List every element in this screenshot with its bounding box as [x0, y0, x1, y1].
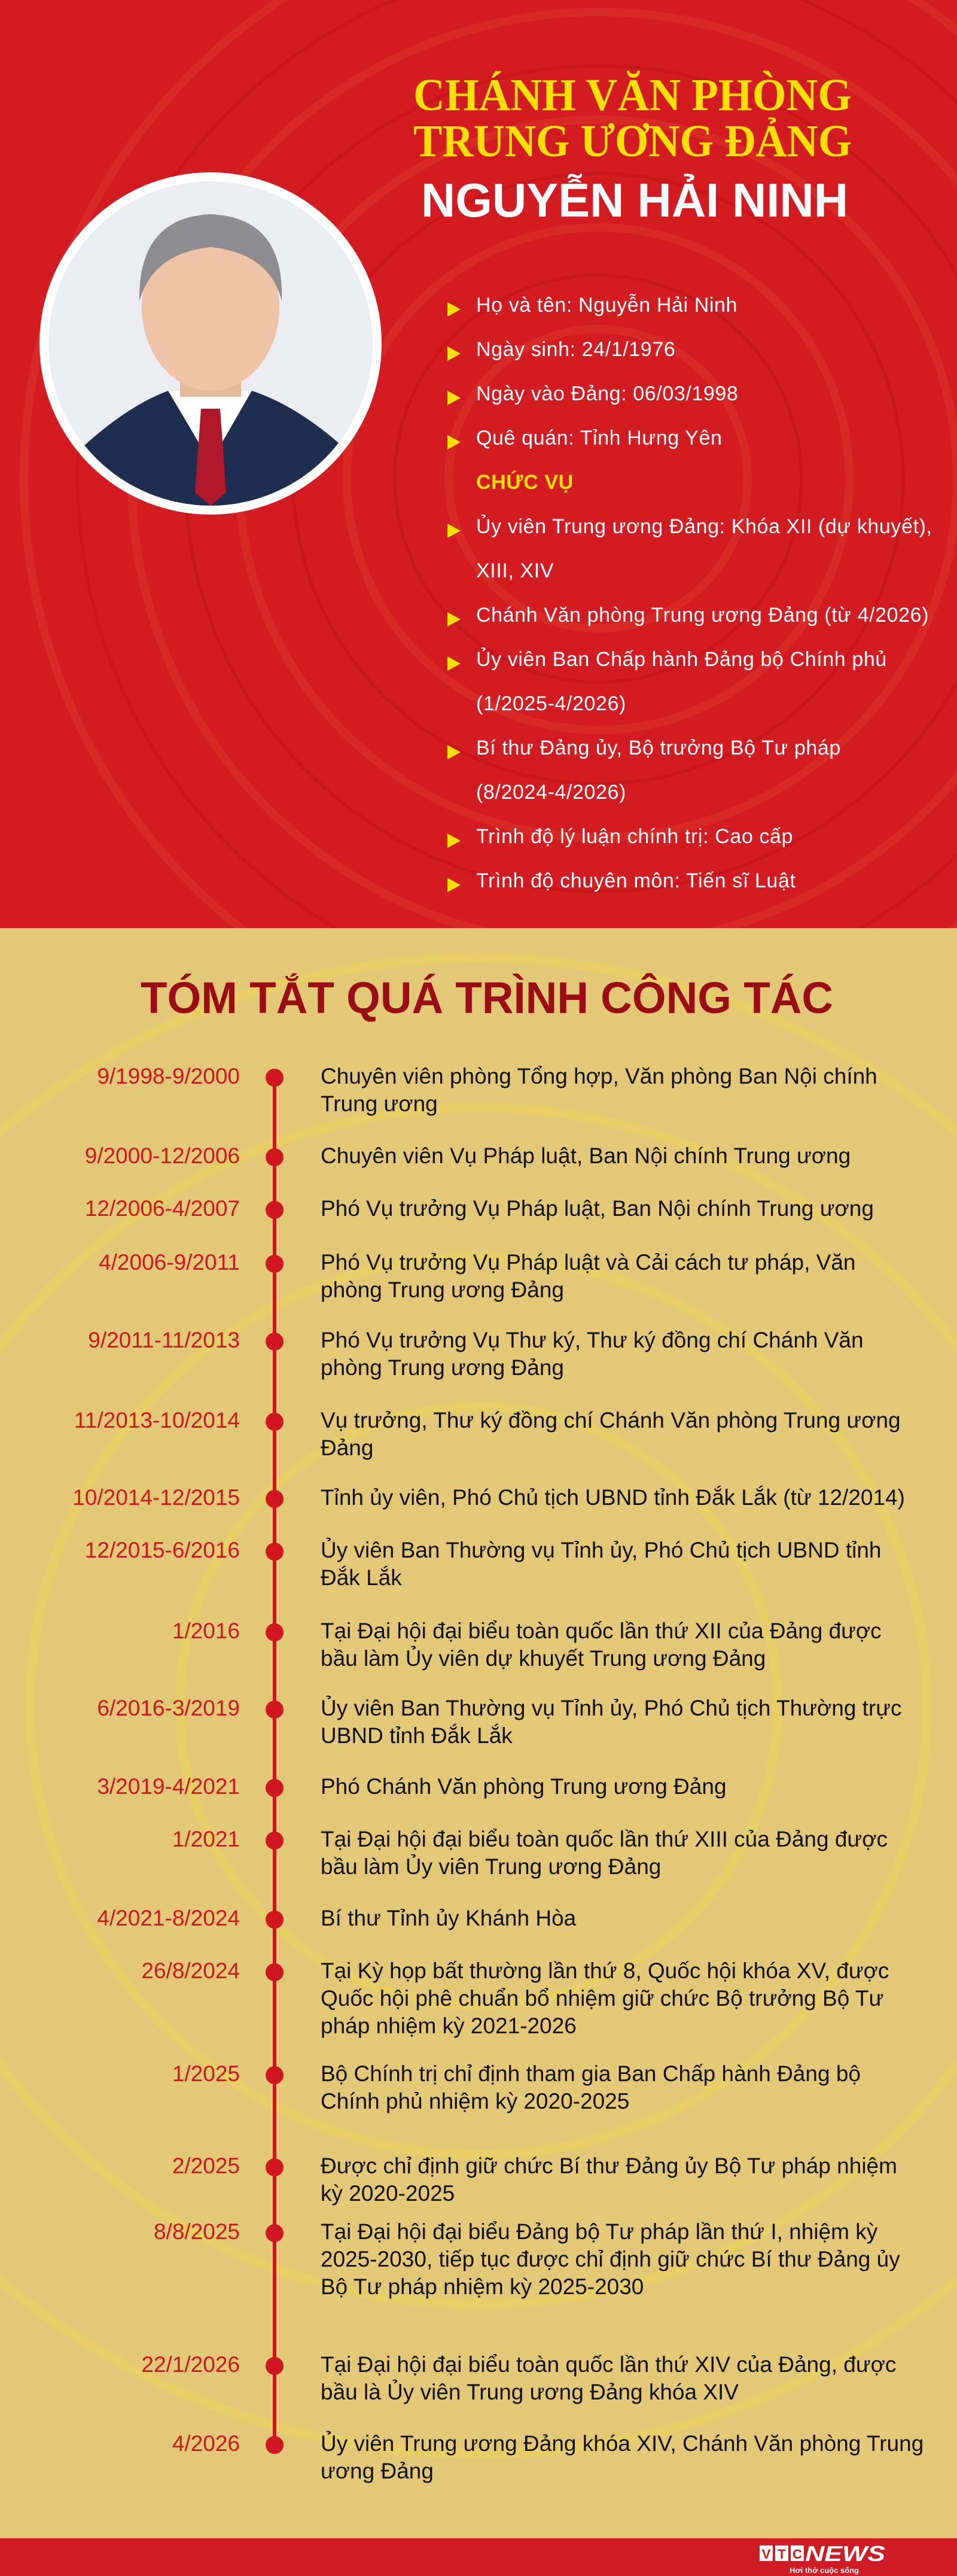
footer: VTC News logo [0, 2538, 957, 2576]
timeline: Chính phủ nhiệm kỳ 2020-2025 [321, 2089, 629, 2113]
timeline: Chuyên viên phòng Tổng hợp, Văn phòng Ban Nội chính [321, 1064, 877, 1088]
bullet list: personal info: Họ và tên: Nguyễn Hải Ninh [476, 294, 737, 317]
timeline: Trung ương [321, 1091, 438, 1116]
timeline: Tại Đại hội đại biểu toàn quốc lần thứ XIV của Đảng, được [321, 2352, 896, 2377]
timeline: Ủy viên Trung ương Đảng khóa XIV, Chánh Văn phòng Trung [321, 2431, 924, 2456]
bullet list: personal info: (1/2025-4/2026) [476, 692, 626, 715]
footer: VTC News logo: V [762, 2547, 771, 2562]
timeline: 4/2006-9/2011 [99, 1250, 240, 1275]
bullet list: personal info: Ủy viên Trung ương Đảng: Khóa XII (dự khuyết), [476, 515, 932, 538]
timeline: kỳ 2020-2025 [321, 2181, 455, 2206]
timeline: Đảng [321, 1435, 373, 1460]
timeline: Ủy viên Ban Thường vụ Tỉnh ủy, Phó Chủ tịch Thường trực [321, 1696, 902, 1720]
title [413, 70, 852, 227]
timeline: 10/2014-12/2015 [72, 1485, 240, 1510]
heading: timeline title: TÓM TẮT QUÁ TRÌNH CÔNG TÁC [141, 973, 833, 1023]
timeline: 1/2025 [172, 2061, 240, 2086]
timeline: Tại Đại hội đại biểu toàn quốc lần thứ XIII của Đảng được [321, 1827, 888, 1851]
panel: red header [0, 0, 957, 928]
timeline: Vụ trưởng, Thư ký đồng chí Chánh Văn phòng Trung ương [321, 1408, 901, 1433]
timeline: 2/2025 [172, 2154, 240, 2178]
title: CHÁNH VĂN PHÒNG [413, 70, 852, 120]
bullet list: personal info: (8/2024-4/2026) [476, 781, 626, 804]
timeline: Được chỉ định giữ chức Bí thư Đảng ủy Bộ Tư pháp nhiệm [321, 2154, 897, 2178]
title: NGUYỄN HẢI NINH [421, 174, 848, 227]
timeline: Chuyên viên Vụ Pháp luật, Ban Nội chính Trung ương [321, 1143, 851, 1168]
timeline: Tỉnh ủy viên, Phó Chủ tịch UBND tỉnh Đắk Lắk (từ 12/2014) [321, 1485, 905, 1510]
bullet list: personal info: Quê quán: Tỉnh Hưng Yên [476, 427, 722, 449]
timeline: 11/2013-10/2014 [74, 1408, 240, 1433]
bullet list: personal info: Ngày vào Đảng: 06/03/1998 [476, 382, 738, 405]
timeline: Phó Vụ trưởng Vụ Pháp luật, Ban Nội chính Trung ương [321, 1196, 874, 1221]
bullet list: personal info: Chánh Văn phòng Trung ương Đảng (từ 4/2026) [476, 604, 929, 626]
photo portrait [39, 172, 382, 515]
timeline: Đắk Lắk [321, 1565, 402, 1590]
bullet list: personal info: Bí thư Đảng ủy, Bộ trưởng Bộ Tư pháp [476, 737, 841, 759]
timeline: 4/2021-8/2024 [97, 1906, 240, 1930]
title: TRUNG ƯƠNG ĐẢNG [413, 116, 852, 166]
bullet list: personal info [447, 294, 932, 892]
footer: VTC News logo: NEWS [805, 2541, 885, 2566]
timeline: 1/2016 [172, 1619, 240, 1643]
bullet list: personal info: Ủy viên Ban Chấp hành Đảng bộ Chính phủ [476, 648, 887, 671]
timeline: Tại Đại hội đại biểu toàn quốc lần thứ XII của Đảng được [321, 1619, 882, 1643]
timeline: 9/1998-9/2000 [97, 1064, 240, 1088]
timeline: 3/2019-4/2021 [97, 1774, 240, 1799]
footer: VTC News logo: Hơi thở cuộc sống [790, 2566, 859, 2575]
timeline: phòng Trung ương Đảng [321, 1278, 564, 1302]
timeline: bầu làm Ủy viên dự khuyết Trung ương Đảng [321, 1646, 766, 1671]
timeline: 8/8/2025 [154, 2219, 240, 2244]
timeline vertical line [273, 1077, 276, 2447]
timeline: 1/2021 [172, 1827, 240, 1851]
footer: VTC News logo: C [793, 2547, 802, 2562]
timeline: 9/2000-12/2006 [85, 1143, 240, 1168]
timeline: bầu là Ủy viên Trung ương Đảng khóa XIV [321, 2380, 739, 2404]
bullet list: personal info: Trình độ lý luận chính trị: Cao cấp [476, 825, 793, 848]
timeline: Bí thư Tỉnh ủy Khánh Hòa [321, 1906, 576, 1930]
timeline: bầu làm Ủy viên Trung ương Đảng [321, 1854, 661, 1879]
timeline: Bộ Chính trị chỉ định tham gia Ban Chấp hành Đảng bộ [321, 2061, 861, 2086]
timeline: 9/2011-11/2013 [88, 1328, 240, 1352]
bullet list: personal info: CHỨC VỤ [476, 471, 574, 494]
timeline: 12/2006-4/2007 [85, 1196, 240, 1221]
timeline: Quốc hội phê chuẩn bổ nhiệm giữ chức Bộ trưởng Bộ Tư [321, 1986, 883, 2011]
timeline: Tại Kỳ họp bất thường lần thứ 8, Quốc hội khóa XV, được [321, 1958, 889, 1983]
timeline: 6/2016-3/2019 [97, 1696, 240, 1720]
timeline: pháp nhiệm kỳ 2021-2026 [321, 2014, 577, 2038]
bullet list: personal info: XIII, XIV [476, 559, 554, 582]
timeline: Phó Chánh Văn phòng Trung ương Đảng [321, 1774, 727, 1799]
timeline: UBND tỉnh Đắk Lắk [321, 1723, 513, 1748]
timeline [72, 1064, 924, 2483]
timeline: Bộ Tư pháp nhiệm kỳ 2025-2030 [321, 2274, 644, 2299]
footer: VTC News logo: T [778, 2547, 786, 2562]
timeline: Phó Vụ trưởng Vụ Thư ký, Thư ký đồng chí Chánh Văn [321, 1328, 864, 1352]
timeline: 26/8/2024 [141, 1958, 240, 1983]
timeline: 4/2026 [172, 2431, 240, 2456]
timeline: 2025-2030, tiếp tục được chỉ định giữ chức Bí thư Đảng ủy [321, 2247, 900, 2271]
timeline: Phó Vụ trưởng Vụ Pháp luật và Cải cách tư pháp, Văn [321, 1250, 856, 1275]
text: ương Đảng [321, 2459, 434, 2483]
bullet list: personal info: Trình độ chuyên môn: Tiến sĩ Luật [476, 869, 796, 892]
timeline: 22/1/2026 [141, 2352, 240, 2377]
timeline: Tại Đại hội đại biểu Đảng bộ Tư pháp lần thứ I, nhiệm kỳ [321, 2219, 877, 2244]
timeline: phòng Trung ương Đảng [321, 1355, 564, 1380]
timeline: Ủy viên Ban Thường vụ Tỉnh ủy, Phó Chủ tịch UBND tỉnh [321, 1538, 881, 1562]
timeline: 12/2015-6/2016 [85, 1538, 240, 1562]
bullet list: personal info: Ngày sinh: 24/1/1976 [476, 338, 675, 361]
